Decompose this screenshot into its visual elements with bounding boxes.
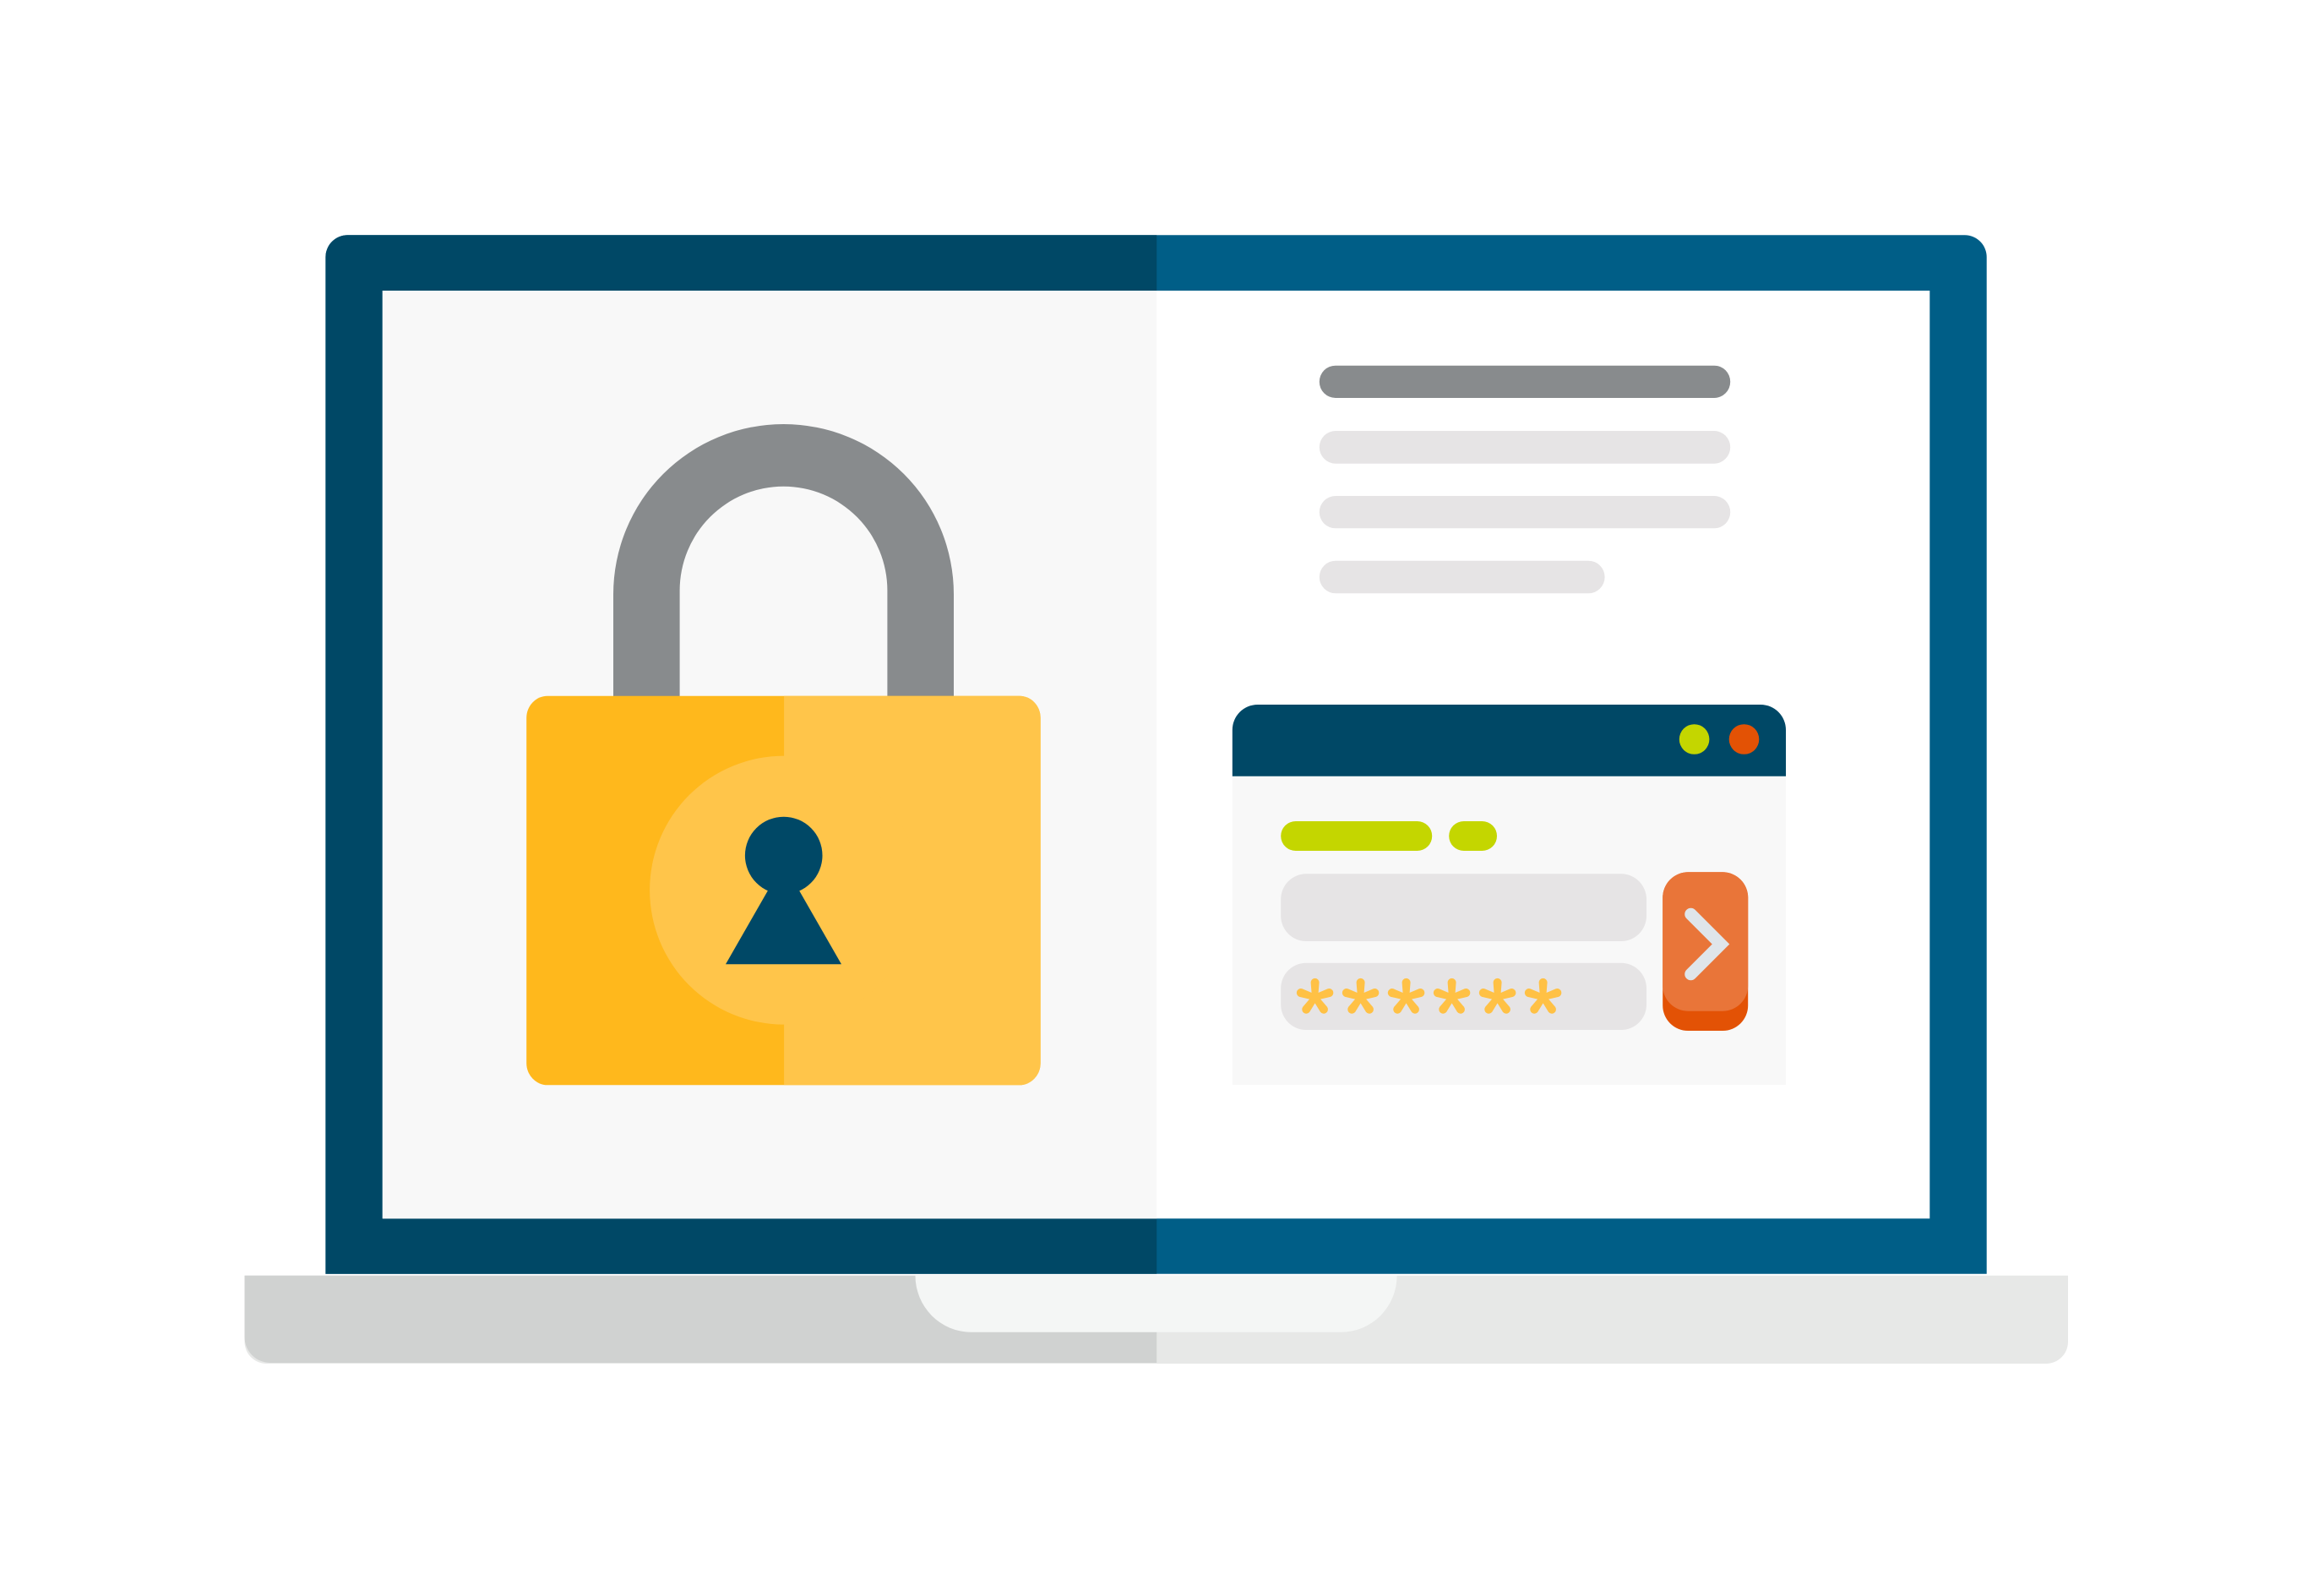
padlock body [526,696,1041,1085]
username field [1281,874,1646,941]
padlock keyhole [726,817,841,964]
icon: green window dot [1679,724,1709,754]
laptop screen [383,291,1929,1218]
padlock [526,424,1041,1085]
small label pill [1449,821,1497,851]
window body [1233,776,1786,1085]
text placeholder lines [1320,366,1730,593]
laptop screen bezel [325,235,1987,1274]
padlock shackle [613,424,954,701]
laptop base notch [916,1276,1397,1332]
username label pill [1281,821,1432,851]
laptop base [245,1276,2068,1364]
window title bar [1233,705,1786,776]
login window [1233,705,1786,1085]
icon: orange window dot [1729,724,1759,754]
submit button with arrow [1663,872,1748,1031]
password field [1281,963,1646,1030]
